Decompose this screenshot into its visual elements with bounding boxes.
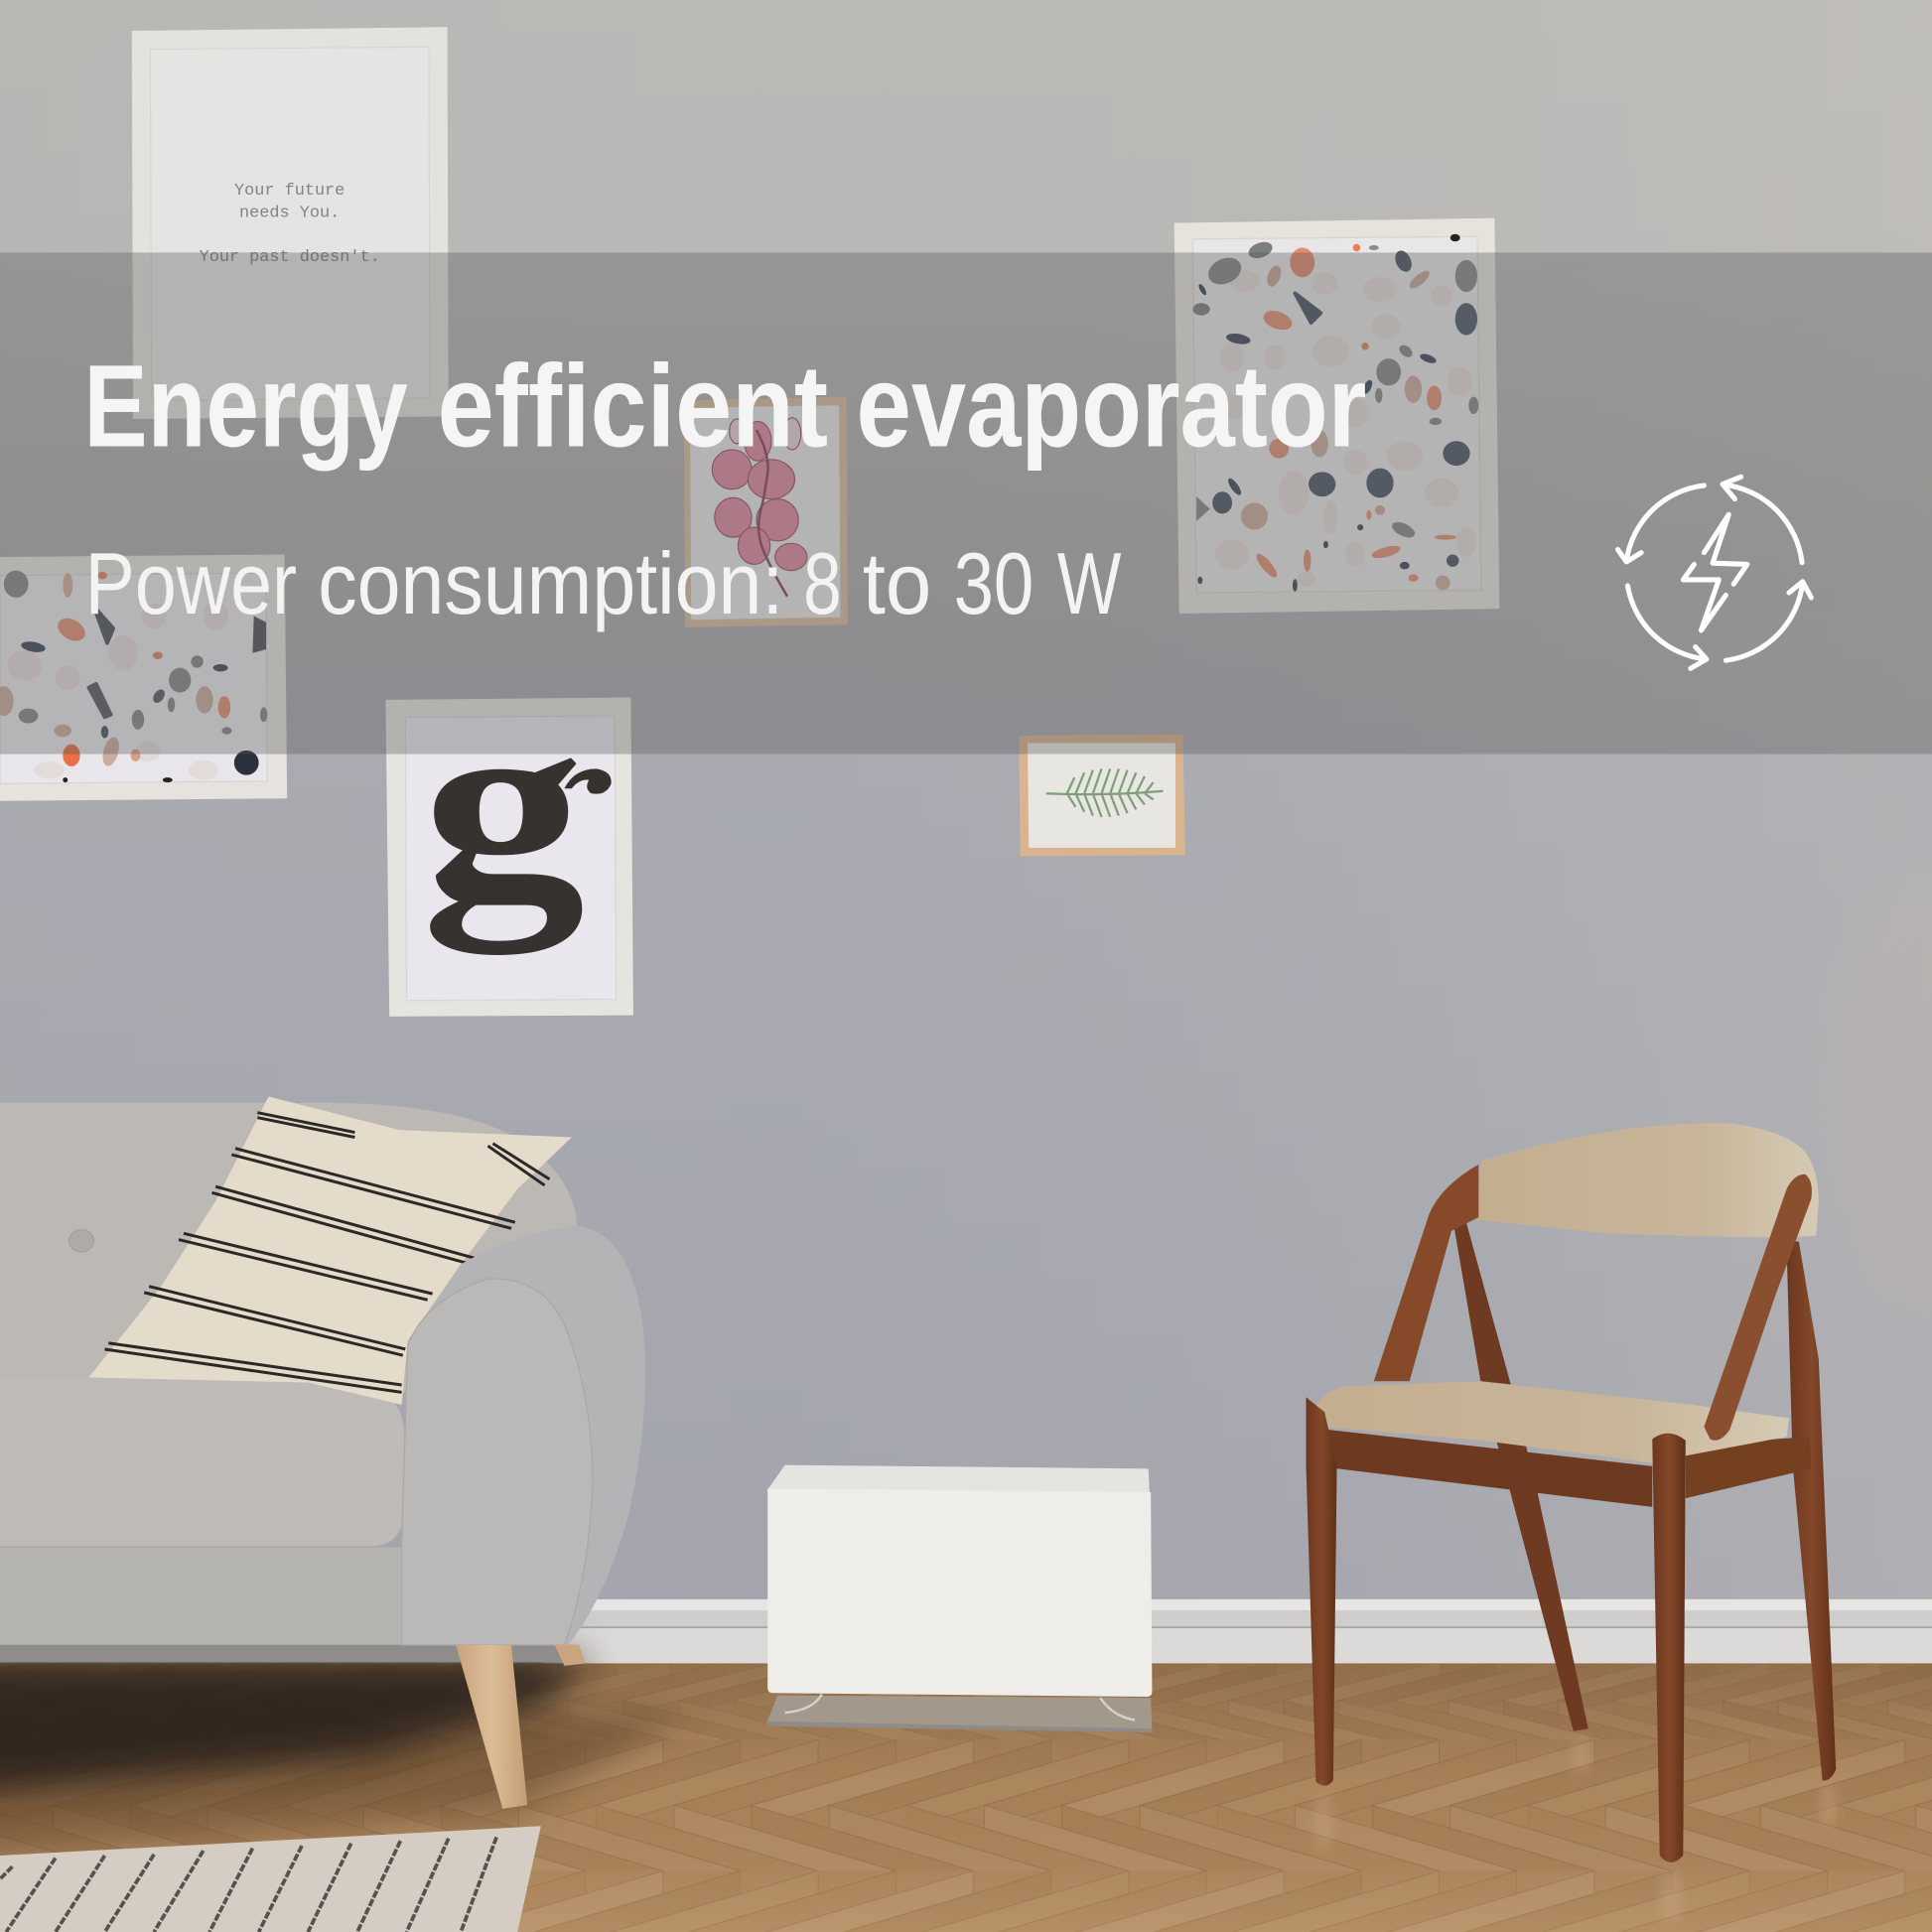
right rail <box>1686 1437 1811 1498</box>
sofa back and seat <box>0 1103 579 1662</box>
framed poster: terrazzo left <box>0 554 287 801</box>
framed poster: letter g <box>385 656 633 1017</box>
humidifier feet <box>785 1694 1135 1721</box>
sofa base <box>0 1548 419 1645</box>
chair <box>1307 1123 1836 1863</box>
title: evaporator <box>857 340 1366 471</box>
poster quote text: needs You. <box>239 204 340 222</box>
sofa button <box>69 1230 93 1252</box>
right arm <box>1704 1174 1812 1441</box>
framed poster: quote <box>132 27 449 419</box>
humidifier top <box>767 1465 1150 1493</box>
poster quote text: Your future <box>234 182 345 201</box>
front right leg <box>1652 1434 1686 1863</box>
chair leg reflections <box>1314 1736 1837 1925</box>
sofa back <box>0 1103 577 1392</box>
striped pillow <box>88 1097 572 1405</box>
subtitle: Power <box>85 534 297 632</box>
framed poster: pink plant <box>684 397 848 627</box>
rear right leg <box>1787 1241 1836 1780</box>
front rail <box>1307 1397 1652 1507</box>
sofa front leg <box>456 1645 527 1809</box>
left arm <box>1374 1165 1478 1381</box>
parquet floor <box>0 1663 1932 1932</box>
subtitle: 30 <box>954 534 1034 632</box>
g ear <box>564 768 612 794</box>
framed poster: fern <box>1019 735 1185 857</box>
shadow under sofa <box>0 1657 690 1861</box>
subtitle: consumption: <box>318 534 783 632</box>
rear left leg <box>1453 1222 1588 1731</box>
sofa front arm <box>402 1279 593 1645</box>
title: efficient <box>438 340 828 471</box>
back rest <box>1477 1123 1819 1237</box>
baseboard <box>542 1599 1932 1666</box>
sofa rear arm <box>408 1226 645 1645</box>
humidifier <box>766 1465 1152 1732</box>
rug <box>0 1826 541 1932</box>
sofa seat cushion <box>0 1379 404 1547</box>
title <box>83 340 1366 471</box>
humidifier body <box>767 1488 1152 1697</box>
subtitle: W <box>1057 534 1121 632</box>
poster quote text: Your past doesn't. <box>200 248 380 267</box>
sofa rear leg <box>554 1645 586 1666</box>
grey banner <box>0 252 1932 755</box>
sofa arm and legs <box>402 1226 645 1809</box>
subtitle <box>85 534 1121 632</box>
humidifier glass base <box>766 1696 1152 1732</box>
seat <box>1314 1381 1789 1462</box>
icon: energy cycle with lightning bolt <box>1618 477 1811 668</box>
letter g: g <box>421 656 586 959</box>
subtitle: 8 <box>803 534 842 632</box>
title: Energy <box>83 340 408 471</box>
subtitle: to <box>863 534 931 632</box>
front left leg <box>1307 1397 1337 1786</box>
framed poster: terrazzo right <box>1174 218 1499 614</box>
